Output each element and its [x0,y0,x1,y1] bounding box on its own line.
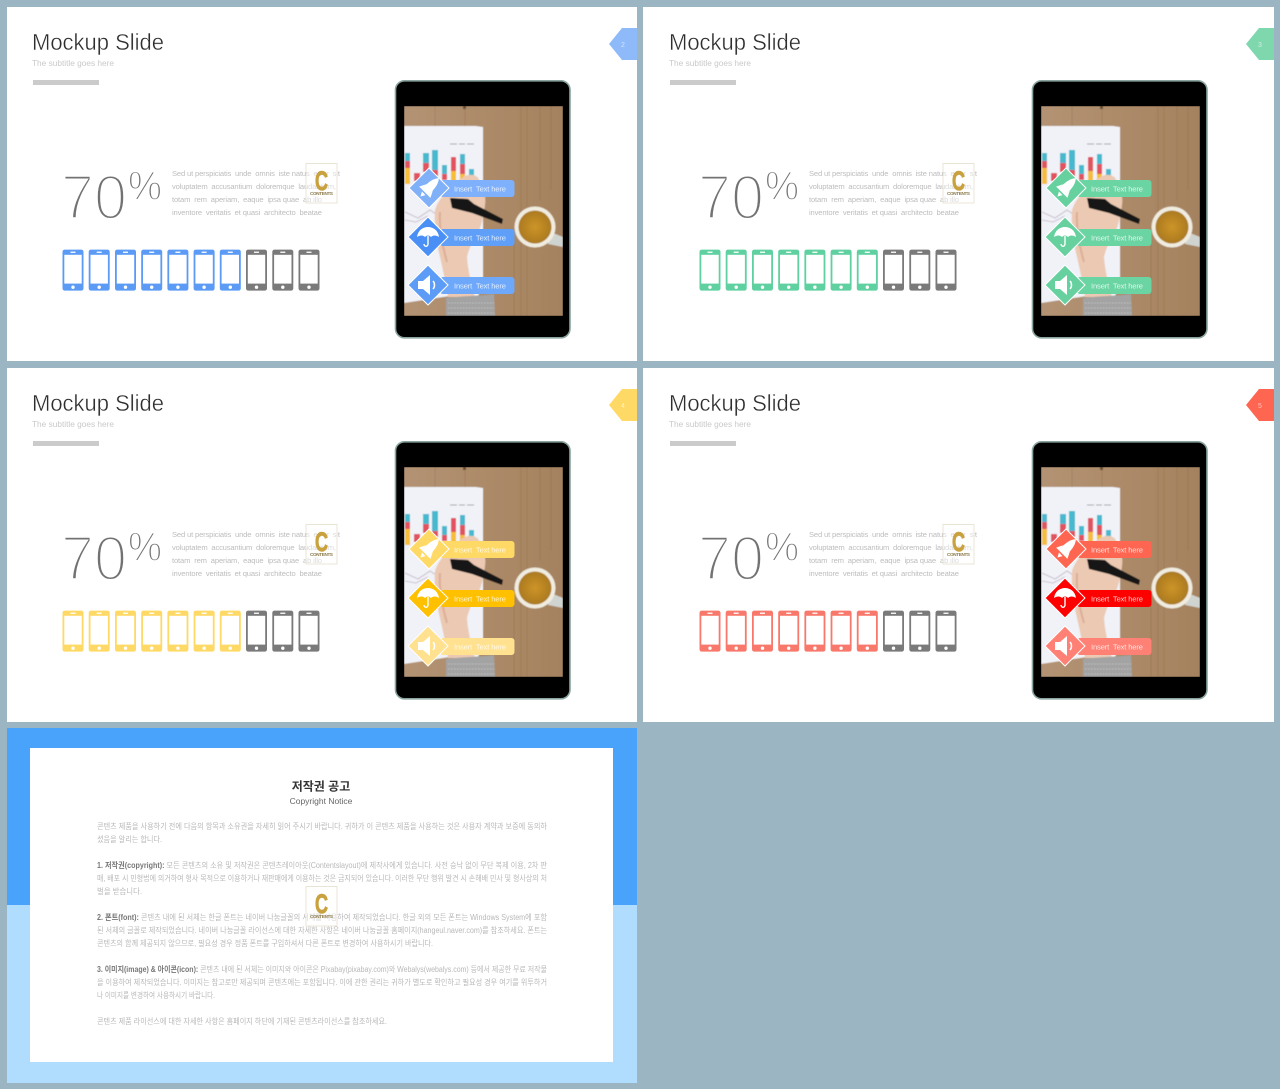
description text: totam rem aperiam, eaque ipsa quae ab illo [809,195,959,204]
callout 3: Insert Text here [1091,642,1143,652]
callout 1 [409,168,514,208]
section 2: font [97,912,548,948]
title: Mockup Slide [669,29,801,55]
description text: totam rem aperiam, eaque ipsa quae ab illo [172,195,322,204]
percentage figure: % [765,524,799,570]
callout 2 [1045,217,1152,257]
callout 1: Insert Text here [454,546,506,554]
tablet mockup [396,81,570,338]
callout 3 [1045,626,1152,666]
intro paragraph: 콘텐츠 제품을 사용하기 전에 다음의 항목과 소유권을 자세히 읽어 주시기 바랍니다. 귀하가 이 콘텐츠 제품을 사용하는 것은 사용자 계약과 보증에 동의하 [97,821,548,831]
watermark logo: CONTENTS [310,914,333,919]
description text: inventore veritatis et quasi architecto beatae [172,208,322,217]
percentage figure: % [128,163,162,209]
pictogram: 70 percent phones [700,250,956,291]
section 3: image and icon: 을 이용하여 제작되었습니다. 이미지는 참고로만 제공되며 콘텐츠에는 포함됩니다. 이에 관한 권리는 귀하가 별도로 확인하고 필요성 경우 여기를 위투하거 [97,977,547,987]
callout 2 [408,578,514,618]
heading underline bar [33,80,99,85]
section 2: font: 콘텐츠의 함께 제공되지 않으므로, 필요성 경우 정품 폰트를 구입하셔서 다른 폰트로 변경하여 사용하시기 바랍니다. [97,938,433,948]
notice heading [290,778,353,806]
percentage figure: % [765,163,799,209]
description text [172,530,341,578]
title: Mockup Slide [32,390,164,416]
page number tab: 3 [1258,42,1262,49]
tablet mockup [396,442,570,699]
callout 1 [1046,529,1152,569]
subtitle: The subtitle goes here [32,58,114,68]
callout 2: Insert Text here [1091,594,1143,604]
description text: totam rem aperiam, eaque ipsa quae ab illo [172,556,322,565]
pictogram: 70 percent phones [62,611,320,652]
closing line: 콘텐츠 제품 라이선스에 대한 자세한 사항은 홈페이지 하단에 기재된 콘텐츠라이선스를 참조하세요. [97,1016,387,1026]
description text: Sed ut perspiciatis unde omnis iste natus error sit [172,530,341,539]
page number tab: 5 [1258,403,1262,410]
percentage figure: 70 [698,524,764,594]
callout 1: Insert Text here [1091,184,1143,194]
watermark logo [306,886,337,926]
description text [809,530,978,578]
watermark logo: CONTENTS [310,191,333,196]
watermark logo: C [952,166,965,196]
percentage figure: 70 [61,524,127,594]
description text: inventore veritatis et quasi architecto beatae [809,208,959,217]
section 3: image and icon: 3. 이미지(image) & 아이콘(icon): 콘텐츠 내에 된 서체는 이미지와 아이콘은 Pixabay(pixabay.com)와 Webalys(webalys.com) 등에서 제공한 무료 저작물 [97,964,547,974]
callout 3: Insert Text here [1091,282,1143,290]
watermark logo: CONTENTS [310,552,333,557]
description text: Sed ut perspiciatis unde omnis iste natus error sit [809,530,978,539]
intro paragraph: 셨음을 알리는 합니다. [97,834,162,844]
page number tab [1246,28,1274,60]
page number tab [609,28,637,60]
percentage figure [698,524,799,594]
watermark logo: C [315,889,328,919]
title: Mockup Slide [32,29,164,55]
heading underline bar [33,441,99,446]
section 1: copyright: 1. 저작권(copyright): 모든 콘텐츠의 소유 및 저작권은 콘텐츠레이아웃(Contentslayout)에 제작사에게 있습니다. 사전 승낙 없이 무단 복제 이용, 2차 판 [97,860,548,870]
watermark logo: C [952,527,965,557]
watermark logo: CONTENTS [947,191,970,196]
tablet mockup [1032,442,1207,699]
description text: voluptatem accusantium doloremque laudantium, [809,182,973,191]
subtitle: The subtitle goes here [32,419,114,429]
description text: voluptatem accusantium doloremque laudantium, [172,543,336,552]
section 3: image and icon: 나 이미지를 변경하여 사용하시기 바랍니다. [97,990,215,1000]
description text [172,169,341,217]
callout 3 [1045,265,1152,305]
percentage figure [61,163,162,233]
subtitle: The subtitle goes here [669,58,751,68]
panel: blue mockup slide [7,7,637,361]
callout 2: Insert Text here [454,594,506,604]
callout 3 [408,626,514,666]
section 2: font: 된 서체의 글꼴로 제작되었습니다. 네이버 나눔글꼴 라이선스에 대한 자세한 사항은 네이버 나눔글꼴 홈페이지(hangeul.naver.com)를 참조하세요. 폰트는 [97,925,547,935]
section 1: copyright [97,860,548,896]
notice heading: 저작권 공고 [292,778,350,794]
heading underline bar [670,80,736,85]
description text: inventore veritatis et quasi architecto beatae [172,569,322,578]
callout 1 [409,529,514,569]
page number tab [1246,389,1274,421]
callout 2: Insert Text here [454,234,506,242]
description text: voluptatem accusantium doloremque laudantium, [172,182,336,191]
callout 3: Insert Text here [454,642,506,652]
callout 1: Insert Text here [1091,546,1143,554]
tablet mockup [1032,81,1207,338]
percentage figure: % [128,524,162,570]
pictogram: 70 percent phones [62,250,320,291]
description text: totam rem aperiam, eaque ipsa quae ab illo [809,556,959,565]
percentage figure [61,524,162,594]
callout 1: Insert Text here [454,184,506,194]
watermark logo: C [315,166,328,196]
page number tab: 2 [621,42,625,49]
subtitle: The subtitle goes here [669,419,751,429]
section 1: copyright: 매, 배포 시 민형법에 의거하여 형사 목적으로 이용하거나 재판매에게 이용하는 것은 금지되어 있습니다. 이러한 무단 행위 발견 시 손해배 민사 및 형사상의 처 [97,873,547,883]
percentage figure [698,163,799,233]
page number tab [609,389,637,421]
panel: yellow mockup slide [7,368,637,722]
panel: green mockup slide [643,7,1274,361]
callout 2 [408,217,514,257]
title: Mockup Slide [669,390,801,416]
percentage figure: 70 [61,163,127,233]
description text: inventore veritatis et quasi architecto beatae [809,569,959,578]
watermark logo: C [315,527,328,557]
section 2: font: 2. 폰트(font): 콘텐츠 내에 된 서체는 한글 폰트는 네이버 나눔글꼴의 서체를 사용하여 제작되었습니다. 한글 외의 모든 폰트는 Windows System에 포함 [97,912,548,922]
callout 3: Insert Text here [454,282,506,290]
watermark logo [943,524,974,564]
callout 1 [1046,168,1152,208]
section 1: copyright: 벌을 받습니다. [97,886,142,896]
panel: red mockup slide [643,368,1274,722]
percentage figure: 70 [698,163,764,233]
callout 2: Insert Text here [1091,234,1143,242]
description text [809,169,978,217]
callout 2 [1045,578,1152,618]
intro paragraph [97,821,548,844]
panel: copyright notice [7,728,637,1083]
heading underline bar [670,441,736,446]
watermark logo [943,164,974,203]
pictogram: 70 percent phones [700,611,956,652]
description text: voluptatem accusantium doloremque laudantium, [809,543,973,552]
watermark logo [306,164,337,203]
callout 3 [408,265,514,305]
page number tab: 4 [621,403,625,410]
watermark logo: CONTENTS [947,552,970,557]
watermark logo [306,524,337,564]
description text: Sed ut perspiciatis unde omnis iste natus error sit [809,169,978,178]
notice heading: Copyright Notice [290,796,353,806]
description text: Sed ut perspiciatis unde omnis iste natus error sit [172,169,341,178]
section 3: image and icon [97,964,547,1000]
